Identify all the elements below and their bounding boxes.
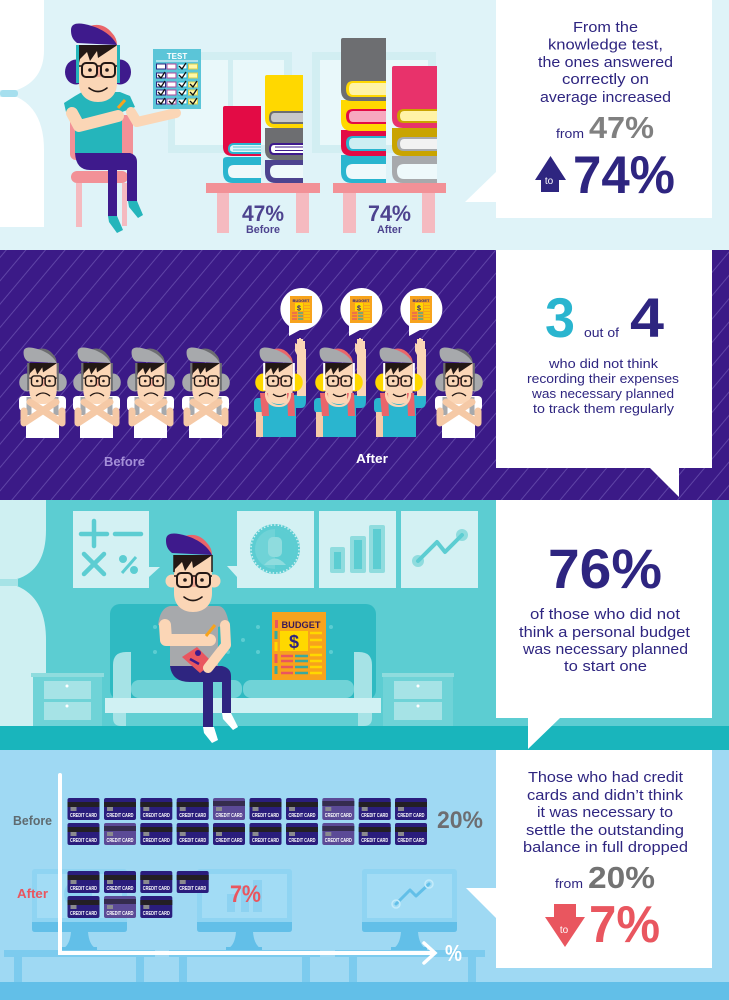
credit cards: after: CREDIT CARD: [143, 911, 170, 917]
budget sheet: [272, 612, 326, 680]
table: after: [333, 183, 446, 233]
sofa: [105, 604, 381, 726]
label: 74% after: 74%: [368, 201, 411, 226]
credit cards: after: CREDIT CARD: [179, 886, 206, 892]
from 20%: [555, 860, 655, 895]
credit cards: before: CREDIT CARD: [143, 838, 170, 844]
background window shape: [0, 0, 44, 227]
credit cards: before: CREDIT CARD: [325, 813, 352, 819]
thought panel: bar chart: [319, 511, 396, 588]
from 47%: 47%: [589, 110, 654, 145]
callout text 4: [523, 770, 688, 856]
budget bubble 2: [340, 288, 382, 336]
callout text 1: knowledge test,: [548, 38, 663, 54]
credit cards: after: CREDIT CARD: [70, 886, 97, 892]
credit cards: before: CREDIT CARD: [252, 813, 279, 819]
label: before: Before: [104, 455, 145, 469]
callout text 4: cards and didn’t think: [527, 788, 684, 804]
arrow up: to: to: [545, 176, 554, 187]
callout text 4: Those who had credit: [528, 770, 683, 786]
callout text 1: correctly on: [562, 72, 649, 88]
callout text 4: settle the outstanding: [526, 823, 684, 839]
student in chair: [64, 24, 176, 233]
credit cards: before: CREDIT CARD: [106, 813, 134, 819]
callout text 2: [527, 356, 680, 416]
value: 7%: 7%: [230, 881, 261, 908]
section 4: credit cards: [0, 750, 729, 1000]
credit cards: before: CREDIT CARD: [70, 838, 97, 844]
budget bubble 2: BUDGET: [353, 298, 370, 303]
arrow down: to: [545, 904, 585, 947]
background monitors: [32, 869, 457, 950]
test sheet: TEST: [167, 52, 187, 61]
callout panel 2: [496, 250, 712, 497]
nightstand right: [382, 673, 454, 726]
section 3: personal budget: [0, 500, 729, 750]
arrow down: to: to: [560, 925, 569, 936]
credit cards: after: CREDIT CARD: [70, 911, 97, 917]
74%: 74%: [573, 146, 675, 205]
callout text 2: who did not think: [548, 356, 659, 371]
budget bubble 3: $: [417, 306, 421, 312]
credit cards: before: CREDIT CARD: [216, 838, 243, 844]
credit cards: before: [68, 798, 427, 845]
credit cards: before: CREDIT CARD: [106, 838, 134, 844]
credit cards: before: CREDIT CARD: [143, 813, 170, 819]
budget bubble 1: BUDGET: [293, 298, 310, 303]
callout text 2: to track them regularly: [533, 401, 675, 416]
credit cards: before: CREDIT CARD: [70, 813, 97, 819]
from 47%: [556, 110, 654, 145]
thought panel: line chart: [401, 511, 478, 588]
credit cards: before: CREDIT CARD: [361, 838, 388, 844]
76%: 76%: [548, 537, 662, 600]
budget bubble 1: $: [297, 306, 301, 312]
label: 74% after: After: [377, 224, 403, 236]
table: before: [206, 183, 320, 233]
callout text 1: [538, 20, 673, 106]
thought panel: coin: [227, 511, 314, 588]
credit cards: before: CREDIT CARD: [361, 813, 388, 819]
7%: 7%: [589, 896, 660, 954]
label: before: Before: [13, 813, 52, 828]
book stack: before, tall: [265, 75, 303, 183]
budget bubble 2: $: [357, 306, 361, 312]
callout text 3: of those who did not: [530, 606, 681, 623]
background windows: [168, 52, 436, 153]
from 47%: from: [556, 126, 584, 141]
book stack: before, short: [223, 106, 261, 183]
nightstand left: [31, 673, 104, 726]
callout text 2: was necessary planned: [531, 386, 674, 401]
book stack: after, tall: [341, 38, 386, 183]
callout panel 3: [496, 500, 712, 749]
3 out of 4: 4: [630, 286, 664, 349]
credit cards: before: CREDIT CARD: [398, 813, 425, 819]
budget sheet: $: [289, 632, 299, 652]
label: 47% before: Before: [246, 224, 280, 236]
3 out of 4: 3: [545, 286, 575, 349]
label: after: After: [356, 452, 388, 466]
after group: three raised hands, one unconvinced: [254, 338, 483, 438]
from 20%: from: [555, 876, 583, 891]
callout panel 4: [466, 750, 712, 968]
credit cards: before: CREDIT CARD: [288, 838, 316, 844]
test sheet: [153, 49, 201, 109]
label: 47% before: [242, 201, 284, 236]
arrow up: to: [535, 156, 566, 192]
callout text 1: From the: [573, 20, 638, 36]
section 1: knowledge test: [0, 0, 729, 250]
3 out of 4: [545, 286, 664, 349]
credit cards: before: CREDIT CARD: [179, 813, 206, 819]
callout text 3: think a personal budget: [519, 624, 691, 641]
credit cards: before: CREDIT CARD: [325, 838, 352, 844]
budget bubble 3: [400, 288, 442, 336]
credit cards: before: CREDIT CARD: [216, 813, 243, 819]
credit cards: after: CREDIT CARD: [106, 911, 134, 917]
thought panel: maths symbols: [73, 511, 160, 588]
book stack: after, short: [392, 66, 437, 183]
student on sofa: [158, 534, 238, 743]
credit cards: before: CREDIT CARD: [179, 838, 206, 844]
credit cards: after: [68, 871, 209, 918]
credit cards: before: CREDIT CARD: [252, 838, 279, 844]
callout text 4: it was necessary to: [537, 805, 673, 821]
budget bubble 3: BUDGET: [413, 298, 430, 303]
credit cards: before: CREDIT CARD: [288, 813, 316, 819]
callout panel 1: [465, 0, 712, 218]
budget sheet: BUDGET: [282, 620, 321, 630]
section 2: recording expenses: [0, 250, 729, 500]
label: 47% before: 47%: [242, 201, 284, 226]
callout text 3: was necessary planned: [522, 641, 688, 658]
callout text 3: to start one: [564, 658, 647, 675]
before group: four unconvinced students: [19, 348, 230, 438]
callout text 3: [519, 606, 691, 675]
background window shape: [0, 500, 46, 726]
chart axes: %: [445, 940, 462, 966]
callout text 2: recording their expenses: [527, 371, 680, 386]
callout text 1: average increased: [540, 90, 671, 106]
budget bubble 1: [280, 288, 322, 336]
callout text 4: balance in full dropped: [523, 840, 688, 856]
value: 20%: 20%: [437, 807, 483, 834]
label: after: After: [17, 886, 48, 901]
from 20%: 20%: [588, 860, 655, 895]
background desks: [4, 950, 485, 982]
callout text 1: the ones answered: [538, 55, 673, 71]
credit cards: after: CREDIT CARD: [106, 886, 134, 892]
credit cards: after: CREDIT CARD: [143, 886, 170, 892]
3 out of 4: out of: [584, 325, 619, 340]
chart axes: [60, 775, 462, 966]
credit cards: before: CREDIT CARD: [398, 838, 425, 844]
